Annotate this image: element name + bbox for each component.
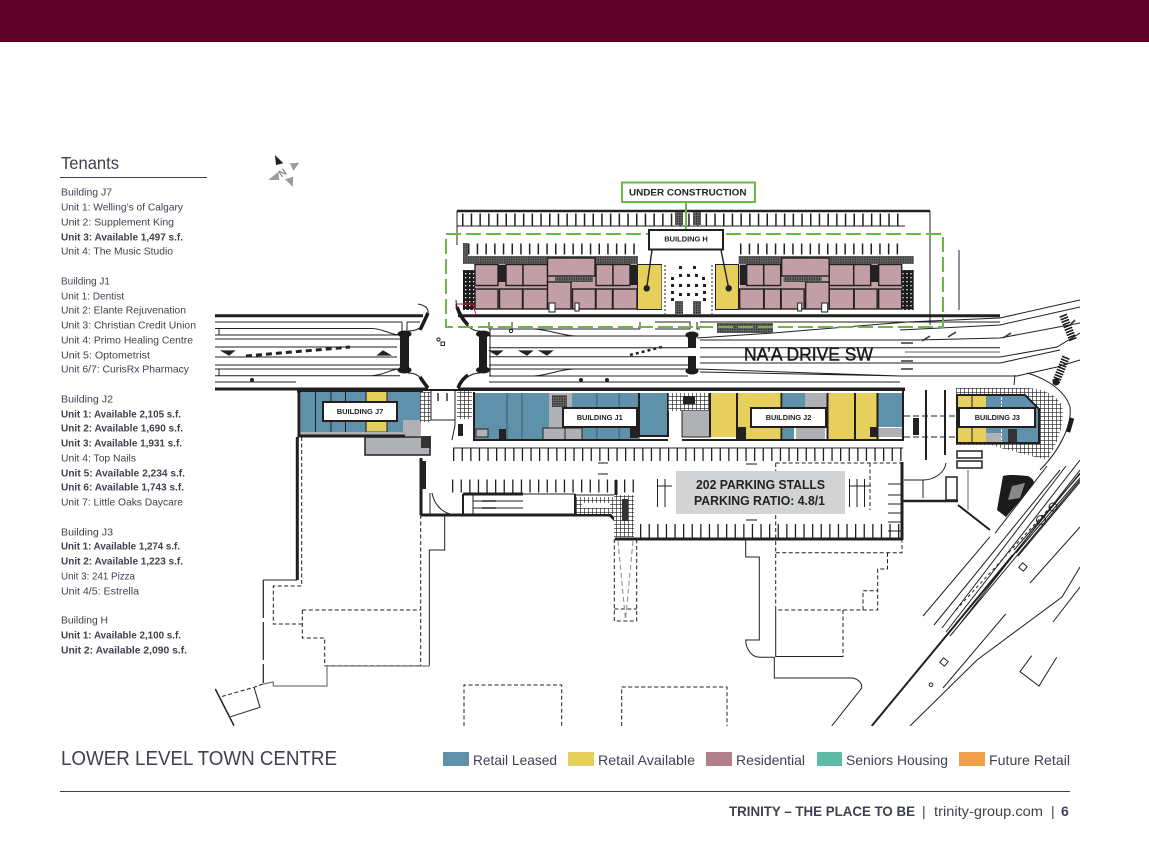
tenant list: building J7: Unit 4: The Music Studio <box>61 246 173 258</box>
tenant list: building J3 <box>61 528 183 598</box>
tenant list: building J3: Unit 2: Available 1,223 s.f. <box>61 556 183 568</box>
tenant list: building J1: Unit 5: Optometrist <box>61 350 150 362</box>
site plan drawing <box>215 182 1080 726</box>
east access drive <box>902 390 990 530</box>
header band <box>0 0 1149 42</box>
footer text: | <box>1051 803 1055 819</box>
parking summary label: 202 PARKING STALLS <box>696 478 825 492</box>
building H: units <box>456 243 960 328</box>
west half residential units <box>463 243 638 312</box>
tenant list: building H: Building H <box>61 616 108 626</box>
road: Na'a Drive linework <box>215 300 1080 470</box>
tenant list: building J2: Unit 1: Available 2,105 s.f. <box>61 410 181 420</box>
tenant list: building H <box>61 616 187 656</box>
tenant list: building J3: Building J3 <box>61 528 113 538</box>
tenant list: building J2 <box>61 394 185 508</box>
building J2 <box>682 390 903 441</box>
tenant list: building H: Unit 2: Available 2,090 s.f. <box>61 646 187 656</box>
tenant list: building J2: Unit 6: Available 1,743 s.f. <box>61 482 184 494</box>
legend: retail leased: Retail Leased <box>473 752 557 768</box>
tenant list: building J1: Unit 3: Christian Credit Union <box>61 320 196 332</box>
tenant list: building J1: Building J1 <box>61 276 110 288</box>
icon: north compass: N <box>277 167 289 180</box>
tenant list: building J2: Unit 7: Little Oaks Daycare <box>61 498 183 508</box>
tenant list: building J1 <box>61 276 196 376</box>
tenant list: building J3: Unit 1: Available 1,274 s.f. <box>61 542 180 552</box>
tenants heading: Tenants <box>61 153 119 173</box>
island and rail corridor <box>872 460 1080 726</box>
building J7: BUILDING J7 <box>337 407 383 416</box>
footer text: 6 <box>1061 803 1069 819</box>
crosswalks and corner curbs <box>398 300 1073 432</box>
legend: retail available: Retail Available <box>598 752 695 768</box>
tenant list: building J1: Unit 4: Primo Healing Centre <box>61 336 193 346</box>
east half residential units <box>739 256 914 312</box>
building J3 <box>956 388 1063 460</box>
parking lot <box>421 448 903 540</box>
tenant list: building J2: Unit 5: Available 2,234 s.f. <box>61 468 185 480</box>
building J2: BUILDING J2 <box>766 413 811 422</box>
footer text: TRINITY – THE PLACE TO BE <box>729 803 915 819</box>
road arrows <box>222 320 1075 382</box>
road name: NA’A DRIVE SW <box>744 345 873 365</box>
building J1: BUILDING J1 <box>577 413 623 422</box>
under construction callout: UNDER CONSTRUCTION <box>629 188 747 199</box>
footer text: | <box>922 803 926 819</box>
tenant list: building J7: Unit 1: Welling’s of Calgary <box>61 202 184 214</box>
building J3: BUILDING J3 <box>975 413 1020 422</box>
tenant list: building J2: Unit 4: Top Nails <box>61 454 136 464</box>
tenant list: building J2: Building J2 <box>61 394 113 406</box>
tenant list: building J7 <box>61 188 184 258</box>
building H parking rows <box>457 211 959 333</box>
tenant list: building J2: Unit 3: Available 1,931 s.f. <box>61 438 182 450</box>
icon: north compass <box>268 155 299 187</box>
tenant list: building J3: Unit 3: 241 Pizza <box>61 572 135 582</box>
legend: residential: Residential <box>736 752 805 768</box>
building H label with leaders <box>644 230 732 291</box>
under construction callout <box>622 182 755 230</box>
legend <box>443 752 1070 768</box>
footer text: trinity-group.com <box>934 803 1043 819</box>
tenant list: building J7: Unit 2: Supplement King <box>61 218 174 228</box>
tenant list: building J1: Unit 1: Dentist <box>61 292 124 302</box>
courtyard <box>662 264 712 314</box>
tenant list: building H: Unit 1: Available 2,100 s.f. <box>61 630 181 642</box>
retail available units H <box>638 264 738 310</box>
footer rule <box>60 791 1070 792</box>
south lot boundaries <box>464 463 902 726</box>
plan title: LOWER LEVEL TOWN CENTRE <box>61 748 337 770</box>
footer text <box>729 803 1069 819</box>
parking summary label <box>676 471 845 514</box>
tenant list: building J7: Building J7 <box>61 188 112 198</box>
tenant list: building J2: Unit 2: Available 1,690 s.f. <box>61 424 183 434</box>
building J7 <box>297 390 431 455</box>
parking summary label: PARKING RATIO: 4.8/1 <box>694 494 825 508</box>
legend: residential <box>706 752 805 768</box>
under-construction boundary <box>446 234 943 327</box>
tenant list: building J3: Unit 4/5: Estrella <box>61 586 139 598</box>
legend: seniors housing: Seniors Housing <box>846 752 948 768</box>
west entry walkway <box>431 390 472 440</box>
building H label with leaders: BUILDING H <box>664 235 708 244</box>
west lot boundaries <box>215 437 445 726</box>
building J1 <box>423 390 905 440</box>
tenant list: building J1: Unit 6/7: CurisRx Pharmacy <box>61 364 190 376</box>
legend: future retail: Future Retail <box>989 752 1070 768</box>
tenant list: building J1: Unit 2: Elante Rejuvenation <box>61 306 186 316</box>
tenant list: building J7: Unit 3: Available 1,497 s.f. <box>61 232 183 244</box>
